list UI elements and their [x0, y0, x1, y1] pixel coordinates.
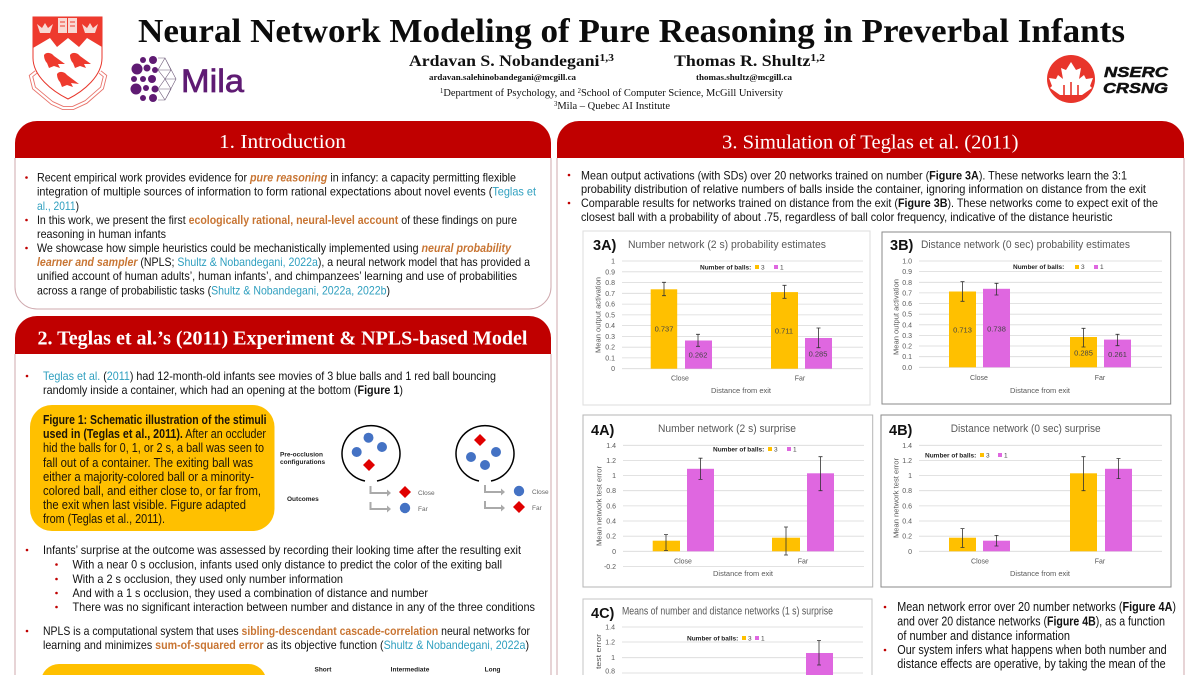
text block: network error bullets: and over 20 distance networks (Figure 4B), as a function: [897, 614, 1165, 628]
authors and affiliations: Thomas R. Shultz: [674, 53, 796, 70]
chart 4A: number network surprise: 1.4: [606, 443, 616, 450]
chart 4A: number network surprise: 0.4: [606, 518, 616, 526]
authors and affiliations: Ardavan S. Nobandegani: [409, 53, 581, 70]
heading: 1. Introduction: 1. Introduction: [219, 131, 346, 153]
authors and affiliations: 1,2: [810, 53, 825, 64]
chart 3B: distance network probability estimates: Distance network (0 sec) probability estimates: [921, 239, 1130, 251]
text block: infants' surprise and NPLS bullets: With a near 0 s occlusion, infants used only distance to predict the color of the exiting ball: [72, 558, 502, 572]
chart 4B: distance network surprise: 1: [908, 473, 912, 480]
logo: NSERC CRSNG: [1047, 55, 1169, 103]
chart 3A: number network probability estimates: Distance from exit: [711, 386, 772, 395]
chart 4A: number network surprise: 1: [793, 446, 797, 454]
chart 4A: number network surprise: Mean network test error: [594, 465, 604, 546]
figure 1: schematic of stimuli: Pre-occlusion: [280, 452, 323, 458]
callout: Figure 1 caption: colored ball, and either close to, or far from,: [43, 483, 261, 498]
chart 3A: number network probability estimates: 0.285: [809, 350, 827, 358]
chart 4C: means of number and distance networks surprise: 1: [611, 655, 615, 662]
chart 3A: number network probability estimates: Far: [795, 376, 806, 382]
figure 1: schematic of stimuli: Close: [418, 490, 435, 497]
text block: simulation bullets: probability distribution of relative numbers of balls inside the container, ignoring information on distance from the exit: [581, 182, 1147, 196]
chart 3A: number network probability estimates: Mean output activation: [594, 277, 602, 353]
panel: 2. Experiment and NPLS-based model: [15, 316, 551, 675]
text block: experiment description: [26, 369, 496, 397]
chart 3A: number network probability estimates: 0.4: [605, 323, 615, 330]
chart 3B: distance network probability estimates: Far: [1095, 375, 1106, 382]
chart 4A: number network surprise: 0.2: [606, 534, 616, 541]
panel: 1. Introduction: [15, 121, 551, 309]
chart 3A: number network probability estimates: 0.737: [655, 324, 673, 334]
figure 1: schematic of stimuli: [280, 426, 549, 513]
chart 3A: number network probability estimates: 0.2: [605, 345, 615, 352]
chart 3B: distance network probability estimates: Mean output activation: [892, 279, 900, 355]
chart 4B: distance network surprise: 0.2: [902, 534, 912, 541]
chart 3A: number network probability estimates: 0.8: [605, 280, 615, 287]
chart 4A: number network surprise: 0: [612, 549, 616, 556]
callout: Figure 1 caption: hid the balls for 0, 1, or 2 s, a ball was seen to: [43, 440, 264, 455]
text block: simulation bullets: [568, 168, 1158, 224]
chart 3B: distance network probability estimates: Distance from exit: [1010, 386, 1071, 395]
callout: Figure 1 caption: used in (Teglas et al., 2011). After an occluder: [43, 426, 267, 441]
chart 3A: number network probability estimates: Close: [671, 376, 689, 382]
heading: 3. Simulation of Teglas et al.: 3. Simulation of Teglas et al. (2011): [722, 132, 1018, 154]
chart 4B: distance network surprise: [881, 415, 1171, 587]
heading: 1. Introduction: [15, 121, 551, 158]
chart 3A: number network probability estimates: [583, 231, 870, 405]
chart 3B: distance network probability estimates: 0.7: [902, 290, 912, 297]
chart 4A: number network surprise: 0.8: [606, 488, 616, 495]
chart 3B: distance network probability estimates: 3B): [890, 238, 914, 254]
authors and affiliations: 1,3: [599, 53, 614, 64]
chart 4A: number network surprise: Close: [674, 558, 692, 566]
column labels: short, intermediate, long: Short: [315, 666, 332, 674]
callout: Figure 1 caption: the exit when last visible. Figure adapted: [43, 497, 246, 512]
text block: simulation bullets: Mean output activations (with SDs) over 20 networks trained on number (Figure 3A). These networks learn the 3:1: [581, 168, 1127, 182]
chart 4B: distance network surprise: Distance from exit: [1010, 569, 1071, 578]
chart 4C: means of number and distance networks surprise: test error: [594, 633, 603, 669]
authors and affiliations: School of Computer Science, McGill University: [581, 87, 783, 99]
chart 3A: number network probability estimates: 1: [611, 258, 615, 266]
figure 1: schematic of stimuli: Far: [532, 505, 543, 512]
chart 4A: number network surprise: Number network (2 s) surprise: [658, 423, 796, 435]
text block: experiment description: randomly inside a container, which had an opening at the bottom (Figure 1): [43, 383, 403, 397]
chart 3B: distance network probability estimates: 0.713: [953, 326, 972, 334]
text block: introduction bullets: unified account of human adults’, human infants’, and chimpanzees’ learning and use of probabilities: [37, 269, 517, 283]
chart 3A: number network probability estimates: 0.711: [775, 326, 793, 336]
heading: 3. Simulation of Teglas et al.: [557, 121, 1184, 158]
chart 3A: number network probability estimates: 3A): [593, 238, 617, 254]
chart 3B: distance network probability estimates: 0.8: [902, 280, 912, 287]
chart 4C: means of number and distance networks surprise: 1: [761, 636, 765, 642]
text block: introduction bullets: learner and sampler (NPLS; Shultz & Nobandegani, 2022a), a neural network model that has provided a: [37, 255, 530, 269]
chart 3A: number network probability estimates: 0.6: [605, 302, 615, 309]
chart 3A: number network probability estimates: 3: [761, 264, 765, 272]
chart 4C: means of number and distance networks surprise: [583, 599, 872, 675]
column labels: short, intermediate, long: [315, 666, 501, 674]
chart 3B: distance network probability estimates: 3: [1081, 264, 1085, 271]
figure 1: schematic of stimuli: configurations: [280, 459, 326, 466]
chart 4B: distance network surprise: 0.4: [902, 518, 912, 526]
chart 4B: distance network surprise: Far: [1095, 558, 1106, 566]
chart 4C: means of number and distance networks surprise: Number of balls:: [687, 636, 738, 642]
text block: introduction bullets: We showcase how simple heuristics could be mechanistically implemented using neural probability: [37, 241, 512, 255]
title: Neural Network Modeling of Pure Reasoning in Preverbal Infants: [138, 13, 1125, 50]
chart 3B: distance network probability estimates: 0.5: [902, 312, 912, 319]
chart 4C: means of number and distance networks surprise: 3: [748, 636, 752, 642]
chart 3B: distance network probability estimates: 0.4: [902, 322, 912, 329]
chart 4C: means of number and distance networks surprise: Means of number and distance networks (1 s) surprise: [622, 606, 833, 618]
text block: infants' surprise and NPLS bullets: Infants’ surprise at the outcome was assessed by recording their looking time after the resulting exit: [43, 543, 522, 557]
chart 4A: number network surprise: 1.2: [606, 458, 616, 465]
callout: second yellow caption box: [41, 664, 265, 675]
text block: infants' surprise and NPLS bullets: There was no significant interaction between number and distance in any of the three conditions: [72, 600, 535, 614]
figure 1: schematic of stimuli: Far: [418, 506, 429, 513]
chart 3A: number network probability estimates: 0.9: [605, 269, 615, 276]
authors and affiliations: 1: [440, 87, 444, 95]
chart 4A: number network surprise: Far: [798, 558, 809, 566]
callout: Figure 1 caption: from (Teglas et al., 2011).: [43, 511, 165, 526]
chart 3B: distance network probability estimates: 0.0: [902, 365, 912, 372]
authors and affiliations: 2: [578, 87, 581, 95]
text block: experiment description: Teglas et al. (2011) had 12-month-old infants see movies of 3 blue balls and 1 red ball bouncing: [43, 369, 496, 383]
chart 3B: distance network probability estimates: 0.285: [1074, 348, 1093, 358]
text block: infants' surprise and NPLS bullets: With a 2 s occlusion, they used only number information: [72, 572, 343, 586]
chart 3A: number network probability estimates: 0.3: [605, 334, 615, 341]
chart 3A: number network probability estimates: 0.1: [605, 355, 615, 362]
chart 3B: distance network probability estimates: [882, 232, 1171, 404]
text block: simulation bullets: Comparable results for networks trained on distance from the exit (Figure 3B). These networks come to expect exit of the: [581, 196, 1158, 210]
column labels: short, intermediate, long: Intermediate: [391, 666, 430, 674]
chart 4A: number network surprise: 3: [774, 446, 778, 454]
authors and affiliations: thomas.shultz@mcgill.ca: [696, 72, 793, 82]
chart 4B: distance network surprise: Mean network test error: [892, 457, 900, 538]
text block: introduction bullets: reasoning in human infants: [37, 227, 166, 241]
text block: network error bullets: [884, 599, 1176, 671]
text block: introduction bullets: Recent empirical work provides evidence for pure reasoning in infancy: a capacity permitting flexible: [37, 170, 516, 184]
chart 3B: distance network probability estimates: 0.1: [902, 354, 912, 361]
chart 3B: distance network probability estimates: 1.0: [902, 258, 912, 266]
chart 4A: number network surprise: -0.2: [604, 564, 616, 571]
logo: NSERC CRSNG: CRSNG: [1103, 80, 1168, 97]
chart 3A: number network probability estimates: Number of balls:: [700, 264, 751, 272]
logo: Mila: Mila: [181, 63, 244, 99]
text block: introduction bullets: across a range of probabilistic tasks (Shultz & Nobandegani, 2022a, 2022b): [37, 284, 390, 298]
chart 4A: number network surprise: [583, 415, 873, 587]
chart 3B: distance network probability estimates: 0.261: [1108, 350, 1127, 359]
chart 3B: distance network probability estimates: 0.2: [902, 344, 912, 350]
figure 1: schematic of stimuli: Close: [532, 489, 549, 496]
figure 1: schematic of stimuli: Outcomes: [287, 496, 319, 503]
panel: 3. Simulation: [557, 121, 1184, 675]
authors and affiliations: Department of Psychology, and: [443, 87, 578, 99]
chart 4B: distance network surprise: 4B): [889, 423, 913, 439]
chart 3A: number network probability estimates: 1: [780, 264, 784, 272]
chart 4B: distance network surprise: 3: [986, 452, 990, 460]
text block: infants' surprise and NPLS bullets: learning and minimizes sum-of-squared error as its objective function (Shultz & Nobandegani, 2022a): [43, 638, 529, 652]
chart 4A: number network surprise: Number of balls:: [713, 446, 764, 454]
chart 4C: means of number and distance networks surprise: 1.2: [605, 640, 615, 646]
chart 3B: distance network probability estimates: 0.9: [902, 269, 912, 276]
chart 4A: number network surprise: Distance from exit: [713, 569, 774, 578]
chart 4B: distance network surprise: 1.4: [902, 443, 912, 450]
chart 3B: distance network probability estimates: Number of balls:: [1013, 264, 1064, 271]
chart 3A: number network probability estimates: 0.262: [689, 350, 707, 360]
text block: introduction bullets: [25, 170, 537, 298]
logo: NSERC CRSNG: NSERC: [1104, 64, 1169, 81]
text block: introduction bullets: integration of multiple sources of information to form rational expectations about novel events (Teglas et: [37, 184, 537, 198]
chart 4A: number network surprise: 0.6: [606, 503, 616, 510]
heading: 2. Teglas et al. experiment: [15, 316, 551, 354]
chart 3B: distance network probability estimates: Close: [970, 375, 988, 382]
callout: Figure 1 caption: Figure 1: Schematic illustration of the stimuli: [43, 412, 267, 427]
text block: infants' surprise and NPLS bullets: And with a 1 s occlusion, they used a combination of distance and number: [72, 586, 428, 600]
column labels: short, intermediate, long: Long: [485, 666, 501, 674]
logo: McGill shield: [31, 17, 105, 108]
chart 4B: distance network surprise: 0.6: [902, 503, 912, 510]
text block: infants' surprise and NPLS bullets: [26, 543, 535, 652]
chart 4C: means of number and distance networks surprise: 1.4: [605, 624, 615, 632]
chart 4B: distance network surprise: 0.8: [902, 488, 912, 495]
chart 4C: means of number and distance networks surprise: 4C): [591, 606, 615, 622]
logo: Mila: [130, 56, 244, 102]
chart 3B: distance network probability estimates: 0.3: [902, 333, 912, 340]
callout: Figure 1 caption: either a majority-colored ball or a minority-: [43, 469, 254, 484]
chart 3A: number network probability estimates: Number network (2 s) probability estimates: [628, 239, 826, 251]
chart 3B: distance network probability estimates: 0.6: [902, 301, 912, 308]
text block: introduction bullets: al., 2011): [37, 199, 79, 213]
authors and affiliations: Mila – Quebec AI Institute: [557, 100, 670, 112]
chart 3A: number network probability estimates: 0.5: [605, 312, 615, 319]
text block: network error bullets: Mean network error over 20 number networks (Figure 4A): [897, 599, 1176, 614]
chart 4B: distance network surprise: Close: [971, 558, 989, 566]
authors and affiliations: [409, 53, 825, 112]
callout: Figure 1 caption: fall out of a container. The exiting ball was: [43, 455, 253, 470]
text block: introduction bullets: In this work, we present the first ecologically rational, neural-level account of these findings on pure: [37, 213, 517, 227]
chart 4B: distance network surprise: 1: [1004, 452, 1008, 460]
text block: infants' surprise and NPLS bullets: NPLS is a computational system that uses sibling-descendant cascade-correlation neural networks for: [43, 624, 530, 638]
callout: Figure 1 caption: [30, 405, 274, 531]
text block: simulation bullets: closest ball with a probability of about .75, regardless of ball color frequency, indicative of the distance heuristic: [581, 210, 1113, 224]
chart 4A: number network surprise: 4A): [591, 423, 615, 439]
text block: network error bullets: of number and distance information: [897, 628, 1070, 643]
chart 4B: distance network surprise: Distance network (0 sec) surprise: [951, 423, 1101, 435]
chart 4B: distance network surprise: Number of balls:: [925, 452, 976, 460]
heading: 2. Teglas et al. experiment: 2. Teglas et al.’s (2011) Experiment & NPLS-based Model: [38, 328, 528, 350]
authors and affiliations: ardavan.salehinobandegani@mcgill.ca: [429, 72, 577, 82]
authors and affiliations: 3: [554, 100, 558, 108]
chart 3B: distance network probability estimates: 1: [1100, 264, 1104, 271]
chart 3B: distance network probability estimates: 0.738: [987, 324, 1006, 334]
chart 3A: number network probability estimates: 0: [611, 366, 615, 373]
chart 4A: number network surprise: 1: [612, 473, 616, 480]
chart 4B: distance network surprise: 1.2: [902, 458, 912, 465]
chart 4B: distance network surprise: 0: [908, 549, 912, 556]
chart 3A: number network probability estimates: 0.7: [605, 291, 615, 298]
